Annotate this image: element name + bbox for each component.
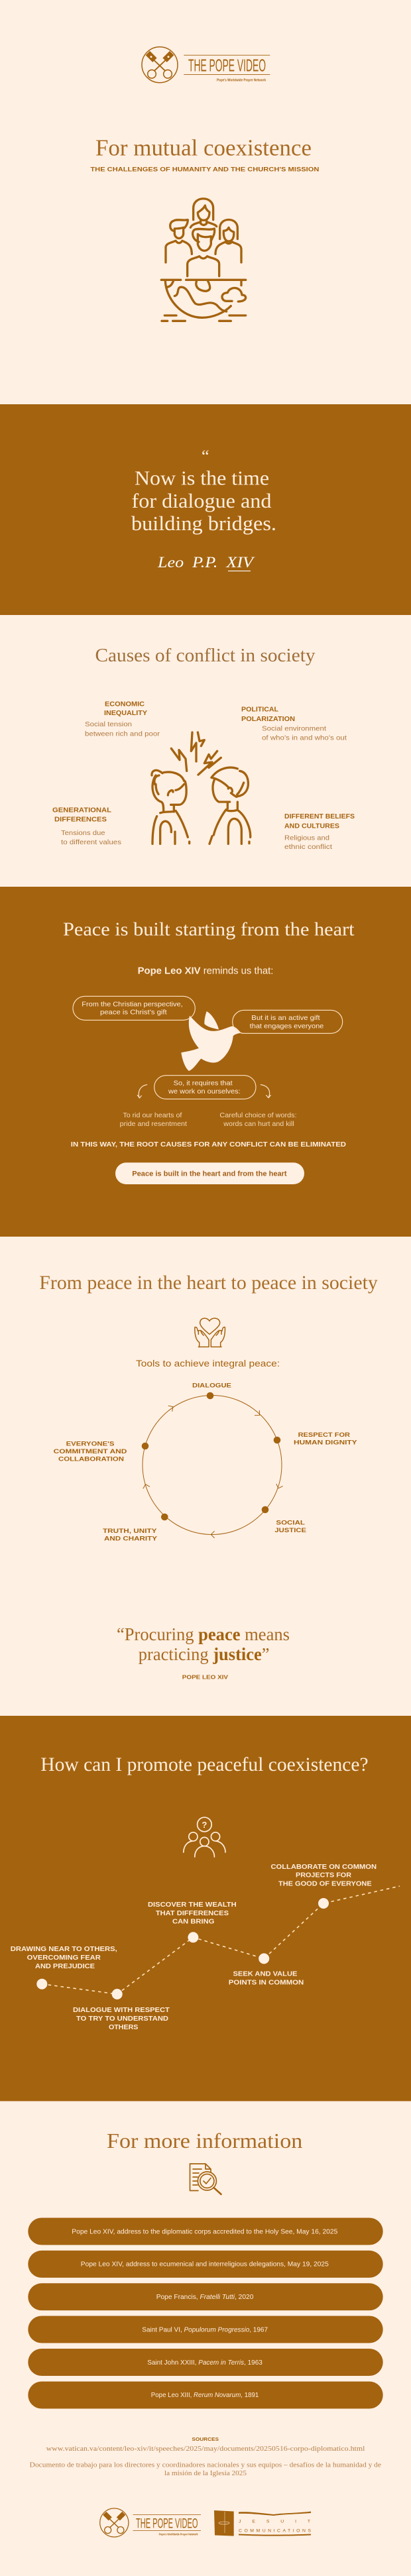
step: drawing near <box>11 1946 117 1970</box>
conclusion text: IN THIS WAY, THE ROOT CAUSES FOR ANY CONFLICT CAN BE ELIMINATED <box>71 1141 346 1148</box>
callout: work on ourselves: So, it requires that <box>174 1080 233 1088</box>
heading: For more information <box>107 2129 302 2153</box>
label: respect for human dignity: RESPECT FOR <box>298 1431 351 1438</box>
highlighted pill: Peace is built in the heart and from the heart <box>132 1170 287 1178</box>
tools heading: Tools to achieve integral peace: <box>136 1358 280 1369</box>
callout: active gift <box>233 1010 343 1033</box>
cycle diagram <box>54 1382 357 1542</box>
label: truth, unity and charity <box>103 1528 157 1542</box>
reference pills: Saint John XXIII, Pacem in Terris, 1963 <box>147 2359 263 2367</box>
cause: different beliefs and cultures: Religious and <box>284 834 329 842</box>
label: truth, unity and charity: TRUTH, UNITY <box>103 1528 156 1534</box>
cause: generational differences: DIFFERENCES <box>54 816 107 823</box>
label: commitment and collaboration: COLLABORATION <box>58 1455 124 1462</box>
arrow: left <box>137 1085 147 1098</box>
callout: Christ's gift <box>73 996 195 1020</box>
cause: economic inequality: INEQUALITY <box>104 710 148 717</box>
step: drawing near: OVERCOMING FEAR <box>27 1954 101 1962</box>
reference pills: Pope Leo XIV, address to the diplomatic corps accredited to the Holy See, May 16, 2025 <box>72 2228 338 2235</box>
cause: political polarization: POLITICAL <box>241 706 278 714</box>
step: dialogue with respect: TO TRY TO UNDERSTAND <box>76 2015 168 2023</box>
reference pills: Pope Leo XIV, address to ecumenical and interreligious delegations, May 19, 2025 <box>81 2261 329 2268</box>
pull quote: “Procuring peace means <box>117 1624 290 1644</box>
quote text <box>131 467 276 535</box>
heading: How can I promote peaceful coexistence? <box>40 1754 369 1775</box>
heading: Causes of conflict in society <box>95 645 316 666</box>
step: collaborate: COLLABORATE ON COMMON <box>270 1864 377 1871</box>
callout: work on ourselves <box>154 1076 256 1099</box>
panel: more information <box>28 2129 383 2537</box>
step: collaborate: PROJECTS FOR <box>296 1872 352 1879</box>
reference pills: Pope Leo XIII, Rerum Novarum, 1891 <box>151 2392 259 2399</box>
icon: document with magnifier <box>190 2164 221 2194</box>
panel: header <box>90 47 320 321</box>
logo: The Pope Video: Pope's Worldwide Prayer Network <box>217 78 266 82</box>
step: dialogue with respect <box>73 2007 170 2031</box>
text: rid our hearts <box>120 1112 187 1128</box>
cause: different beliefs and cultures: ethnic conflict <box>284 843 332 851</box>
quotation mark: “ <box>202 447 209 466</box>
quote attribution: POPE LEO XIV <box>182 1674 229 1681</box>
label: social justice <box>274 1519 306 1534</box>
quote text: for dialogue and <box>131 489 272 512</box>
logo: The Pope Video <box>142 47 270 83</box>
text: rid our hearts: To rid our hearts of <box>123 1112 182 1119</box>
callout: active gift: that engages everyone <box>250 1023 323 1031</box>
cause: political polarization: Social environment <box>262 725 326 733</box>
arrow: right <box>261 1085 270 1098</box>
pull quote: practicing justice” <box>139 1644 269 1664</box>
logo: The Pope Video footer: Pope's Worldwide Prayer Network <box>159 2533 198 2536</box>
quote text: building bridges. <box>131 512 276 535</box>
icon: hands holding heart <box>195 1318 225 1347</box>
cause: political polarization: POLARIZATION <box>241 716 295 723</box>
icon: group with question: ? <box>202 1820 207 1830</box>
label: commitment and collaboration: COMMITMENT AND <box>54 1448 127 1455</box>
label: truth, unity and charity: AND CHARITY <box>104 1536 157 1542</box>
text: careful words: Careful choice of words: <box>219 1112 297 1119</box>
text: careful words <box>219 1112 297 1128</box>
title: For mutual coexistence <box>95 135 312 160</box>
step: collaborate: THE GOOD OF EVERYONE <box>278 1881 372 1888</box>
panel: how to promote coexistence <box>0 1716 411 2101</box>
step: seek and value: POINTS IN COMMON <box>229 1979 304 1987</box>
label: respect for human dignity: HUMAN DIGNITY <box>294 1439 357 1446</box>
panel: causes of conflict <box>52 645 355 851</box>
pull quote <box>117 1624 290 1664</box>
callout: active gift: But it is an active gift <box>251 1014 320 1022</box>
cause: economic inequality: Social tension <box>85 720 132 728</box>
label: social justice: JUSTICE <box>274 1527 306 1534</box>
label: commitment and collaboration <box>54 1440 127 1462</box>
step: discover the wealth: DISCOVER THE WEALTH <box>148 1901 237 1909</box>
step: drawing near: DRAWING NEAR TO OTHERS, <box>11 1946 117 1953</box>
highlighted pill <box>115 1162 304 1184</box>
cause: political polarization <box>241 706 347 742</box>
sources: Documento de trabajo para los directores y coordinadores nacionales y sus equipos – desafíos de la humanidad y de <box>30 2461 382 2469</box>
label: dialogue: DIALOGUE <box>192 1382 231 1389</box>
cause: economic inequality: between rich and poor <box>85 730 160 738</box>
step: dialogue with respect: OTHERS <box>109 2024 139 2031</box>
step: collaborate <box>270 1864 377 1888</box>
panel: quote <box>0 404 411 615</box>
label: respect for human dignity <box>294 1431 357 1446</box>
reference pills <box>28 2217 383 2408</box>
icon: crossed keys <box>142 47 178 83</box>
cause: political polarization: of who's in and who's out <box>262 734 347 742</box>
logo: The Pope Video footer: THE POPE VIDEO <box>136 2516 198 2532</box>
icon: crossed keys small <box>100 2508 129 2537</box>
icon: people above the globe <box>161 199 246 321</box>
reference pills: Saint Paul VI, Populorum Progressio, 1967 <box>142 2326 268 2333</box>
step: discover the wealth <box>148 1901 237 1926</box>
step: seek and value: SEEK AND VALUE <box>233 1971 298 1978</box>
intro text: Pope Leo XIV reminds us that: <box>138 966 273 977</box>
logo: Jesuit Communications <box>214 2510 311 2536</box>
reference pills: Pope Francis, Fratelli Tutti, 2020 <box>156 2294 254 2301</box>
cause: generational differences <box>52 807 121 846</box>
step: dialogue with respect: DIALOGUE WITH RESPECT <box>73 2007 170 2014</box>
panel: peace in society <box>39 1272 378 1681</box>
logo: The Pope Video footer <box>100 2508 201 2537</box>
cause: different beliefs and cultures: DIFFERENT BELIEFS <box>284 813 355 820</box>
icon: group with question <box>184 1817 225 1857</box>
heading: Peace is built starting from the heart <box>63 920 355 940</box>
icon: two arguing people with lightning <box>152 732 251 844</box>
sources: la misión de la Iglesia 2025 <box>164 2470 247 2477</box>
subtitle: THE CHALLENGES OF HUMANITY AND THE CHURCH'S MISSION <box>90 166 320 173</box>
step: discover the wealth: THAT DIFFERENCES <box>156 1910 229 1917</box>
logo: Jesuit Communications: J E S U I T <box>239 2520 310 2524</box>
cause: economic inequality <box>85 701 160 738</box>
panel: peace from the heart <box>0 887 411 1237</box>
sources: SOURCES <box>192 2436 219 2442</box>
cause: generational differences: to different values <box>61 838 121 846</box>
callout: work on ourselves: we work on ourselves: <box>168 1088 241 1095</box>
cause: different beliefs and cultures <box>284 813 355 851</box>
step: discover the wealth: CAN BRING <box>172 1919 215 1926</box>
callout: Christ's gift: From the Christian perspective, <box>82 1000 183 1008</box>
sources <box>30 2436 382 2477</box>
label: commitment and collaboration: EVERYONE'S <box>66 1440 114 1447</box>
sources: www.vatican.va/content/leo-xiv/it/speeches/2025/may/documents/20250516-corpo-diplomatico.html <box>46 2445 365 2453</box>
cause: economic inequality: ECONOMIC <box>105 701 145 708</box>
logo: Jesuit Communications: COMMUNICATIONS <box>239 2529 311 2534</box>
signature: Leo P.P. XIV <box>157 554 255 571</box>
logo: The Pope Video: THE POPE VIDEO <box>188 56 266 76</box>
text: careful words: words can hurt and kill <box>223 1121 294 1128</box>
cause: generational differences: GENERATIONAL <box>52 807 111 814</box>
cause: generational differences: Tensions due <box>61 829 105 837</box>
cause: different beliefs and cultures: AND CULTURES <box>284 823 340 830</box>
text: rid our hearts: pride and resentment <box>120 1121 187 1128</box>
label: social justice: SOCIAL <box>276 1519 306 1526</box>
step: seek and value <box>229 1971 304 1987</box>
heading: From peace in the heart to peace in society <box>39 1272 378 1294</box>
step: drawing near: AND PREJUDICE <box>35 1963 95 1970</box>
quote text: Now is the time <box>135 467 269 490</box>
dashed path with steps <box>36 1886 400 1999</box>
callout: Christ's gift: peace is Christ's gift <box>100 1009 167 1017</box>
icon: dove <box>181 1011 241 1071</box>
